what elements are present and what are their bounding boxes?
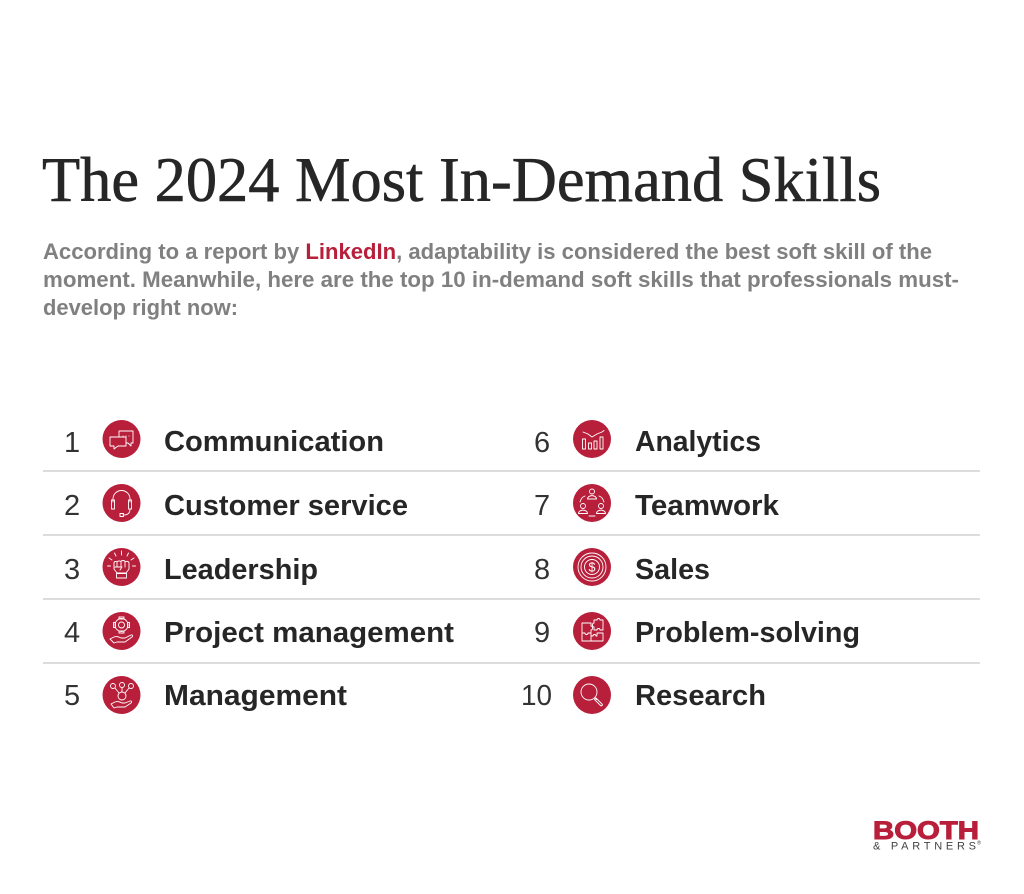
skill 1: communication: 1 — [64, 427, 80, 459]
skill 10: research: 10 — [521, 680, 552, 712]
skill 1: communication — [64, 420, 384, 459]
skill 4: project management — [64, 612, 454, 650]
icon: dollar target: $ — [589, 560, 596, 574]
skill 8: sales: Sales — [635, 554, 710, 586]
skill 6: analytics — [534, 420, 761, 459]
skill 7: teamwork: 7 — [534, 490, 550, 522]
icon: raised fist — [102, 548, 140, 586]
skill 1: communication: Communication — [164, 426, 384, 458]
skill 5: management: 5 — [64, 680, 80, 712]
intro paragraph: moment. Meanwhile, here are the top 10 in-demand soft skills that professionals must- — [43, 267, 959, 292]
intro paragraph: develop right now: — [43, 295, 238, 320]
skill 5: management — [64, 676, 347, 714]
icon: bar chart with trend line — [573, 420, 611, 458]
skill 6: analytics: 6 — [534, 427, 550, 459]
skill 7: teamwork: Teamwork — [635, 490, 780, 522]
skill 10: research — [521, 676, 766, 714]
skill 10: research: Research — [635, 680, 766, 712]
skill 2: customer service: 2 — [64, 490, 80, 522]
skill 4: project management: 4 — [64, 617, 80, 649]
logo: Booth & Partners: & PARTNERS — [873, 840, 976, 852]
skill 3: leadership: Leadership — [164, 554, 318, 586]
skill 6: analytics: Analytics — [635, 426, 761, 458]
icon: three people in a circle — [573, 484, 611, 522]
skill 9: problem-solving: Problem-solving — [635, 617, 860, 649]
intro paragraph — [43, 239, 959, 320]
logo: Booth & Partners: ® — [977, 840, 981, 846]
skill 9: problem-solving — [534, 612, 860, 650]
icon: hand with gear — [102, 612, 140, 650]
skill 8: sales: 8 — [534, 554, 550, 586]
icon: hand with nodes — [102, 676, 140, 714]
icon: dollar target — [573, 548, 611, 586]
icon: speech bubbles — [102, 420, 140, 458]
skill 9: problem-solving: 9 — [534, 617, 550, 649]
skill 3: leadership — [64, 548, 318, 586]
skill 2: customer service: Customer service — [164, 490, 408, 522]
intro paragraph: According to a report by LinkedIn, adaptability is considered the best soft skill of the — [43, 239, 932, 264]
logo: Booth & Partners: BOOTH — [873, 817, 979, 845]
skill 5: management: Management — [164, 680, 347, 712]
title: The 2024 Most In-Demand Skills — [42, 144, 881, 215]
skill 2: customer service — [64, 484, 408, 522]
skill 4: project management: Project management — [164, 617, 454, 649]
skill 7: teamwork — [534, 484, 780, 522]
logo: Booth & Partners — [873, 817, 981, 852]
icon: puzzle pieces — [573, 612, 611, 650]
icon: magnifying glass — [573, 676, 611, 714]
skill 8: sales — [534, 548, 710, 586]
skill 3: leadership: 3 — [64, 554, 80, 586]
icon: headset — [102, 484, 140, 522]
